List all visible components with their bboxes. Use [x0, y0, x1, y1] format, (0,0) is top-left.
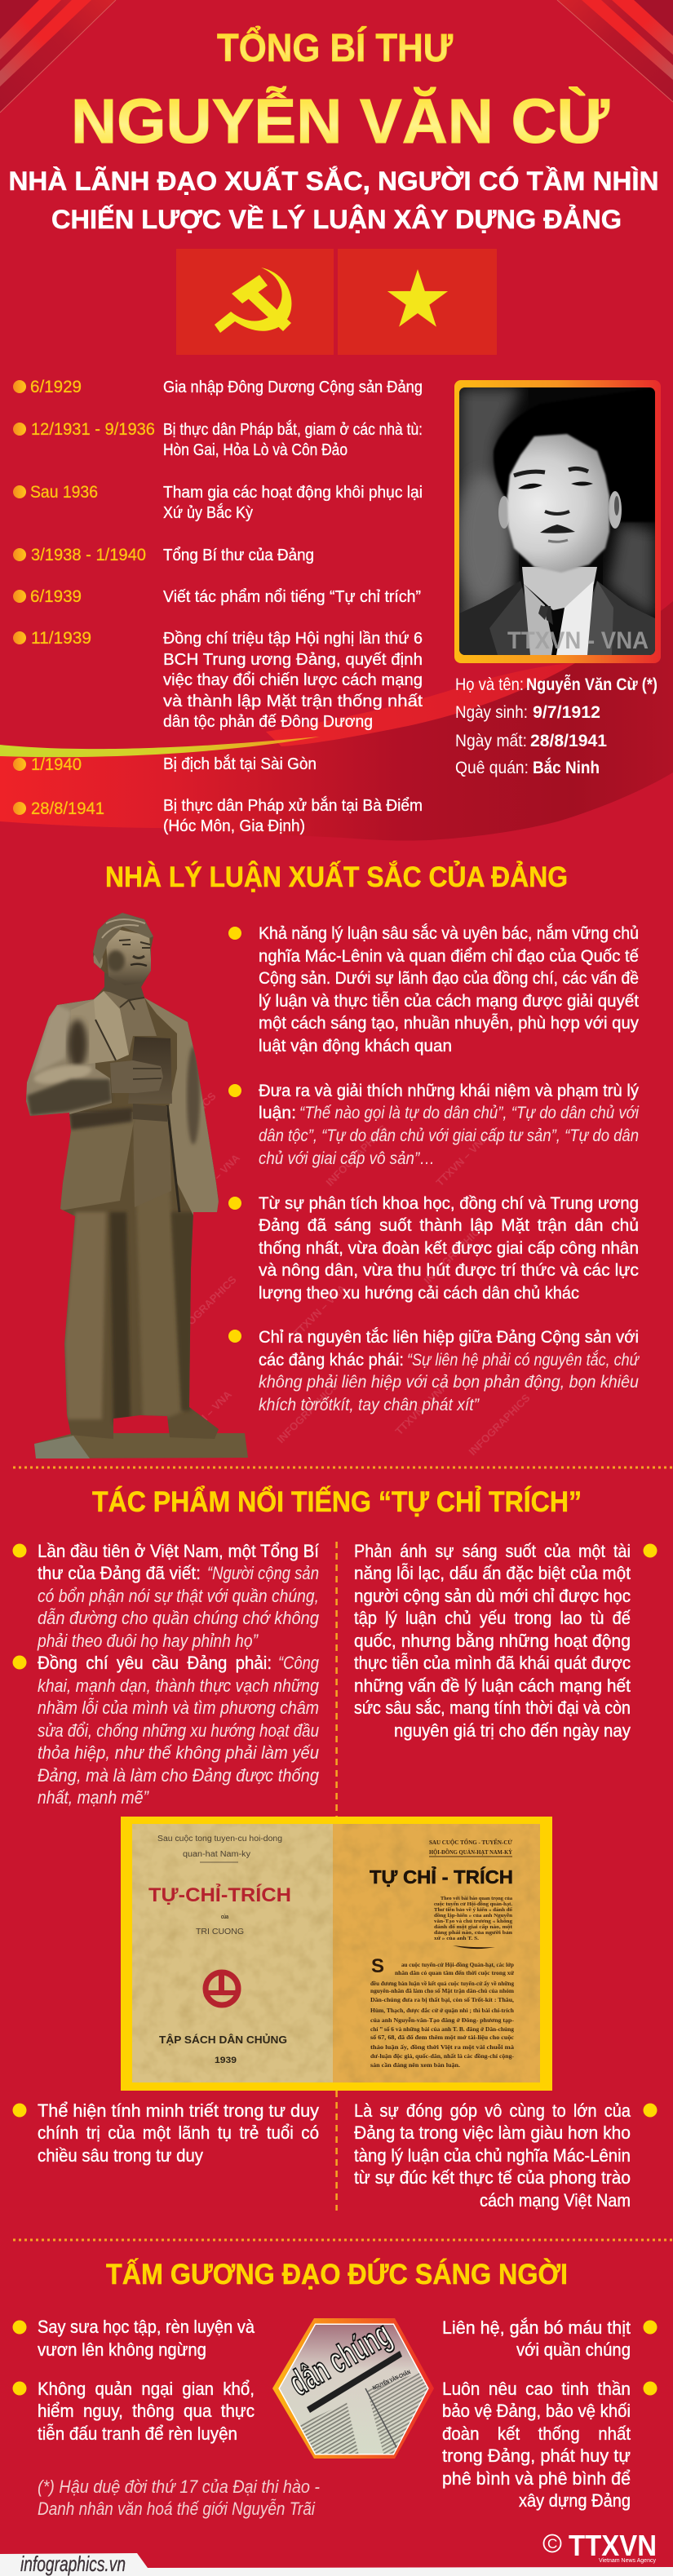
logo: TTXVN [543, 2529, 657, 2564]
personal info [455, 675, 658, 777]
subtitle line 2: CHIẾN LƯỢC VỀ LÝ LUẬN XÂY DỰNG ĐẢNG [51, 205, 622, 234]
book cover left page [148, 1835, 291, 2065]
info: birth date: 9/7/1912 [533, 703, 600, 722]
logo: TTXVN: Vietnam News Agency [599, 2558, 656, 2564]
timeline item: 11/1939: và thành lập Mặt trận thống nhất [163, 692, 423, 710]
book first page right [370, 1838, 515, 2069]
bullet: theoretical ability: lý luận và thực tiễn của cách mạng được giải quyết [259, 990, 639, 1011]
bullet: first time: dẫn đường cho quần chúng chớ không [38, 1608, 320, 1628]
newspaper hexagon photo: NGUYỄN VĂN-CHÂN [371, 2368, 411, 2392]
info: death date: Ngày mất: [455, 732, 527, 750]
book first page right: cuộc tuyển cử Hội-đồng quản-hạt. [434, 1901, 513, 1907]
bullet: party demand: nhất, mạnh mẽ” [38, 1787, 149, 1808]
work: left column [13, 1541, 320, 1808]
book first page right: Dân-chúng đưa ra bị thất bại, còn số Trốt-kít : Thâu, [370, 1996, 514, 2003]
moral: right bullets [442, 2317, 658, 2511]
bullet: alliance principle: Chỉ ra nguyên tắc liên hiệp giữa Đảng Cộng sản với [259, 1326, 639, 1347]
portrait photo [454, 380, 661, 663]
icon: party flag [176, 249, 334, 355]
bullet: wisdom in thinking: Thể hiện tính minh triết trong tư duy [38, 2100, 319, 2121]
footnote: Danh nhân văn hoá thế giới Nguyễn Trãi [38, 2499, 316, 2519]
timeline item: 11/1939: Đồng chí triệu tập Hội nghị lần thứ 6 [163, 629, 423, 648]
bullet: first time: Lần đầu tiên ở Việt Nam, một Tổng Bí [38, 1541, 319, 1561]
info: death date: 28/8/1941 [530, 732, 607, 750]
book cover left page: quan-hat Nam-ky [183, 1850, 250, 1859]
book cover left page: 1939 [215, 2056, 237, 2065]
bullet: alliance principle: các đảng khác phái: [259, 1350, 404, 1370]
work: right column: Phản ánh sự sáng suốt của một tài [354, 1541, 631, 1561]
timeline item: 28/8/1941: (Hóc Môn, Gia Định) [163, 817, 305, 835]
watermarks: TTXVN – VNA [291, 1281, 348, 1339]
bullet: hardship: hiểm nguy, thông qua thực [38, 2401, 255, 2421]
timeline item: 28/8/1941: Bị thực dân Pháp xử bắn tại Bà Điểm [163, 796, 423, 815]
bullet: first time: “Người cộng sản [207, 1563, 319, 1583]
bullet: protect the party: xây dựng Đảng [519, 2490, 631, 2511]
timeline item: 12/1931 - 9/1936 [13, 420, 423, 459]
timeline item: Sau 1936: Sau 1936 [30, 483, 98, 502]
timeline item: 11/1939 [13, 629, 423, 731]
footer strip: infographics.vn [20, 2552, 126, 2576]
watermarks: TTXVN – VNA [177, 1388, 234, 1445]
bullet: wisdom in thinking [13, 2100, 319, 2166]
bullet: first time: có bổn phận nói sự thật với quần chúng, [38, 1586, 319, 1606]
corner ribbon: top right [557, 0, 673, 102]
bullet: theoretical ability [228, 923, 639, 1056]
timeline item: 12/1931 - 9/1936: Bị thực dân Pháp bắt, giam ở các nhà tù: [163, 420, 423, 439]
work: right column: quốc, nhưng bằng những hoạt động [354, 1631, 631, 1651]
bullet: first time [13, 1541, 320, 1651]
heading: famous work: TÁC PHẨM NỔI TIẾNG “TỰ CHỈ TRÍCH” [92, 1485, 582, 1518]
book first page right: đồng lập-hiến » của anh Nguyễn [434, 1913, 513, 1919]
bullet: alliance principle [228, 1326, 640, 1414]
decorative swoosh [0, 601, 673, 841]
watermarks: TTXVN – VNA [434, 1131, 491, 1188]
info: death date [455, 732, 607, 750]
corner ribbon: top left [0, 0, 116, 113]
bullet: scientific analysis [228, 1193, 639, 1303]
work: right column: tập lý luận chủ yếu trong lao tù đế [354, 1608, 631, 1628]
timeline item: 3/1938 - 1/1940 [13, 546, 314, 564]
bullet: study: vươn lên không ngừng [38, 2339, 206, 2360]
bullet: theoretical ability: Cộng sản. Dưới sự lãnh đạo của đồng chí, các vấn đề [259, 968, 639, 988]
info: birth date: Ngày sinh: [455, 703, 528, 722]
book first page right: của anh Nguyễn-văn-Tạo đăng ở Đông- phương tạp- [370, 2016, 515, 2024]
moral: left bullets [13, 2317, 255, 2444]
book first page right: S [371, 1955, 384, 1977]
book photo: Tự chỉ trích [121, 1817, 552, 2091]
work: right column: năng lỗi lạc, dấu ấn đặc biệt của một [354, 1563, 631, 1583]
book first page right: dư-luận độc giả, quốc-dân, nhất là các đồng-chí cộng- [370, 2052, 515, 2060]
book first page right: Thư tiền bảo về ý kiến « đánh đổ [434, 1907, 512, 1913]
book first page right: au cuộc tuyển-cử Hội-đồng Quản-hạt, các lớp [401, 1961, 514, 1968]
bullet: theoretical ability: nghĩa Mác-Lênin và quan điểm chỉ đạo của Quốc tế [259, 946, 639, 966]
logo: TTXVN: C [547, 2536, 557, 2552]
bullet: first time: phải theo đuôi họ hay phỉnh họ” [37, 1631, 259, 1651]
timeline item: 12/1931 - 9/1936: 12/1931 - 9/1936 [31, 420, 155, 439]
bullet: protect the party: phê bình và phê bình để [442, 2468, 631, 2489]
book first page right: xứ » của anh T. S. [434, 1936, 480, 1941]
bullet: theoretical ability: một cách sáng tạo, nhuần nhuyễn, phù hợp với quy [259, 1012, 639, 1033]
bullet: wisdom in thinking: chính trị của một lãnh tụ trẻ tuổi có [38, 2122, 319, 2143]
bullet: party demand: nhầm lỗi của mình và tìm phương châm [38, 1697, 319, 1718]
timeline item: 6/1929: Gia nhập Đông Dương Cộng sản Đảng [163, 378, 423, 396]
timeline item: 11/1939: việc thay đổi chiến lược cách mạng [163, 671, 423, 689]
watermarks: INFOGRAPHICS [422, 1220, 488, 1286]
book first page right: thảo luận ấy, đồng thời Việt ra một vài chuỗi mà [370, 2043, 514, 2051]
footer strip [0, 2552, 673, 2576]
bullet: alliance principle: không phải liên hiệp với cả bọn phản động, bọn khiêu [259, 1372, 639, 1392]
book first page right: HỘI-ĐỒNG QUẢN-HẠT NAM-KỲ [429, 1848, 513, 1856]
book cover left page: TẬP SÁCH DÂN CHỦNG [159, 2034, 287, 2046]
title: Tổng Bí thư: TỔNG BÍ THƯ [217, 25, 453, 70]
logo: TTXVN: TTXVN [569, 2529, 657, 2562]
bullet: party demand: Đảng, mà là làm cho Đảng được thống [38, 1765, 320, 1786]
bullet: concepts: luận: [259, 1103, 296, 1122]
bullet: theoretical ability: Khả năng lý luận sâu sắc và uyên bác, nắm vững chủ [259, 923, 639, 943]
bullet: concepts: chủ với giai cấp vô sản”… [259, 1149, 435, 1168]
timeline [13, 378, 423, 835]
work: right column: những vấn đề lý luận cách mạng hết [354, 1675, 631, 1696]
timeline item: Sau 1936 [13, 483, 423, 522]
bullet: scientific analysis: thống nhất, vừa đoàn kết được giai cấp công nhân [259, 1238, 639, 1258]
footnote: (*) Hậu duệ đời thứ 17 của Đại thi hào - [38, 2476, 320, 2497]
book cover left page: của [221, 1914, 228, 1920]
book first page right: nguyên-nhân đã làm cho số Mặt trận dân-chủ của nhóm [370, 1987, 515, 1994]
bullet: hardship: tiễn đấu tranh để rèn luyện [38, 2423, 237, 2444]
icon: national flag [338, 249, 497, 355]
subtitle line 1: NHÀ LÃNH ĐẠO XUẤT SẮC, NGƯỜI CÓ TẦM NHÌN [8, 166, 659, 196]
bullet: party demand: thỏa hiệp, như thế không phải làm yếu [38, 1742, 319, 1763]
bullet: party demand: “Công [278, 1653, 320, 1673]
book first page right: Theo với bài báo quan trọng của [441, 1897, 512, 1901]
timeline item: 6/1929 [13, 378, 423, 396]
footnote [38, 2476, 320, 2519]
work: right column: người cộng sản dù mới chỉ được học [354, 1586, 631, 1606]
bullet: protect the party [442, 2379, 658, 2511]
bullet: protect the party: Luôn nêu cao tinh thần [442, 2379, 631, 2399]
timeline item: 3/1938 - 1/1940: 3/1938 - 1/1940 [31, 546, 146, 564]
watermarks: TTXVN – VNA [185, 1151, 242, 1209]
bullet: great contribution: Là sự đóng góp vô cùng to lớn của [354, 2100, 631, 2121]
timeline item: 6/1939: 6/1939 [30, 587, 82, 606]
timeline item: 6/1939 [13, 587, 421, 606]
bullet: wisdom in thinking: chiều sâu trong tư duy [38, 2145, 203, 2166]
bullet: scientific analysis: lượng theo xu hướng cải cách dân chủ khác [259, 1283, 579, 1303]
book first page right: văn-Tạo và chủ trương « không [434, 1919, 512, 1924]
bullet: alliance principle: khích tờrốtkít, tay chân phát xít” [259, 1395, 480, 1414]
bullet: protect the party: đoàn kết thống nhất [442, 2423, 631, 2444]
timeline item: 1/1940 [13, 755, 317, 774]
bullet: theoretical ability: luật vận động khách quan [259, 1036, 452, 1056]
bullet: great contribution: cách mạng Việt Nam [480, 2190, 631, 2211]
timeline item: 28/8/1941 [13, 796, 423, 835]
book first page right: TỰ CHỈ - TRÍCH [370, 1865, 513, 1888]
work: right column: nguyên giá trị cho đến ngày nay [394, 1720, 631, 1741]
timeline item: 1/1940: 1/1940 [31, 755, 82, 774]
theorist bullet list [228, 923, 640, 1414]
bullet: concepts [228, 1081, 640, 1168]
bullet: connect with people: Liên hệ, gắn bó máu thịt [442, 2317, 631, 2338]
info: birth date [455, 703, 600, 722]
bullet: scientific analysis: và nông dân, vừa thu hút được trí thức và các lực [259, 1260, 639, 1280]
bullet: scientific analysis: Đảng đã sáng suốt thành lập Mặt trận dân chủ [259, 1215, 639, 1235]
info: full name: Họ và tên: [455, 675, 524, 694]
bullet: great contribution [354, 2100, 658, 2211]
book first page right: SAU CUỘC TỔNG - TUYỂN-CỬ [429, 1838, 512, 1846]
title block [8, 25, 659, 234]
timeline item: 12/1931 - 9/1936: Hòn Gai, Hỏa Lò và Côn Đảo [163, 440, 348, 459]
bullet: party demand: Đồng chí yêu cầu Đảng phải: [38, 1653, 272, 1673]
bullet: party demand: sửa đổi, chống những xu hướng hoạt đầu [38, 1720, 319, 1741]
timeline item: 11/1939: BCH Trung ương Đảng, quyết định [163, 650, 423, 669]
timeline item: 1/1940: Bị địch bắt tại Sài Gòn [163, 755, 317, 773]
bullet: protect the party: bảo vệ Đảng, bảo vệ khối [442, 2401, 631, 2421]
bullet: party demand [13, 1653, 320, 1808]
timeline item: Sau 1936: Xứ ủy Bắc Kỳ [163, 503, 254, 522]
newspaper hexagon photo [272, 2314, 434, 2459]
timeline item: 6/1939: Viết tác phẩm nổi tiếng “Tự chỉ trích” [163, 587, 421, 606]
statue illustration [24, 910, 248, 1458]
info: full name [455, 675, 658, 694]
book cover left page: TỰ-CHỈ-TRÍCH [148, 1883, 291, 1906]
watermarks: INFOGRAPHICS [173, 1273, 239, 1339]
watermarks [153, 1090, 533, 1458]
info: full name: Nguyễn Văn Cừ (*) [526, 675, 658, 694]
book first page right: nhân dân có quan tâm đến thời cuộc trong xứ [395, 1969, 514, 1976]
book first page right: đánh đổ một giai cấp nào, một [434, 1924, 512, 1930]
bullet: great contribution: tàng lý luận của chủ nghĩa Mác-Lênin [354, 2145, 631, 2166]
info: hometown [455, 758, 600, 777]
book first page right: đảng phái nào, của người bản [434, 1931, 513, 1936]
book first page right: chí ” số 6 và những bài của anh T. B. đăng ở Dân-chúng [370, 2025, 514, 2033]
timeline item: 11/1939: dân tộc phản đế Đông Dương [163, 712, 373, 731]
title: Nguyễn Văn Cừ: NGUYỄN VĂN CỪ [71, 86, 609, 157]
bullet: study: Say sưa học tập, rèn luyện và [38, 2317, 255, 2337]
timeline item: 28/8/1941: 28/8/1941 [31, 799, 104, 818]
watermarks: INFOGRAPHICS [467, 1392, 533, 1458]
bullet: hardship [13, 2379, 255, 2444]
bullet: study [13, 2317, 255, 2360]
bullet: first time: thư của Đảng đã viết: [38, 1563, 201, 1583]
bullet: hardship: Không quản ngại gian khổ, [38, 2379, 255, 2399]
bullet: great contribution: Đảng ta trong việc làm giàu hơn kho [354, 2122, 631, 2143]
timeline item: 6/1929: 6/1929 [30, 378, 82, 396]
book first page right: số 67, 68, đã đổ đem thêm một mớ tài-liệu cho cuộc [370, 2034, 515, 2041]
book first page right: đều đương bàn luận về kết quả cuộc tuyển-cử ấy về những [370, 1980, 514, 1987]
work: right column: thực tiễn của mình đã khái quát được [354, 1653, 631, 1673]
bullet: scientific analysis: Từ sự phân tích khoa học, đồng chí và Trung ương [259, 1193, 639, 1213]
timeline item: 11/1939: 11/1939 [31, 629, 91, 648]
watermarks: INFOGRAPHICS [324, 1122, 390, 1188]
book first page right: Hùm, Thạch, được đắc cử ở quận nhì ; thì bài chỉ-trích [370, 2007, 515, 2014]
bullet: great contribution: từ sự đúc kết thực tế của phong trào [354, 2167, 631, 2188]
portrait photo: TTXVN - VNA [507, 627, 649, 654]
timeline item: 3/1938 - 1/1940: Tổng Bí thư của Đảng [163, 546, 314, 564]
timeline item: Sau 1936: Tham gia các hoạt động khôi phục lại [163, 483, 423, 502]
bullet: connect with people [442, 2317, 658, 2360]
book first page right: sản cần đáng nên xem bàn luận. [370, 2061, 460, 2069]
book cover left page: TRI CUONG [196, 1928, 244, 1936]
work: right column: sức sâu sắc, mang tính thời đại và còn [354, 1697, 631, 1718]
watermarks: TTXVN – VNA [393, 1379, 450, 1437]
bullet: protect the party: trong Đảng, phát huy tự [442, 2445, 631, 2466]
newspaper hexagon photo: dân chúng [282, 2314, 398, 2404]
heading: moral example: TẤM GƯƠNG ĐẠO ĐỨC SÁNG NGỜI [106, 2258, 568, 2291]
watermarks: INFOGRAPHICS [275, 1379, 341, 1445]
book cover left page: Sau cuộc tong tuyen-cu hoi-dong [157, 1835, 282, 1843]
bullet: party demand: khai, mạnh dạn, thành thực vạch những [38, 1675, 320, 1696]
info: hometown: Bắc Ninh [533, 758, 600, 777]
info: hometown: Quê quán: [455, 759, 529, 777]
work: right column [354, 1541, 658, 1741]
watermarks: INFOGRAPHICS [153, 1090, 219, 1156]
bullet: concepts: Đưa ra và giải thích những khái niệm và phạm trù lý [259, 1081, 639, 1100]
heading: theorist section: NHÀ LÝ LUẬN XUẤT SẮC CỦA ĐẢNG [105, 861, 568, 893]
bullet: connect with people: với quần chúng [516, 2339, 631, 2360]
